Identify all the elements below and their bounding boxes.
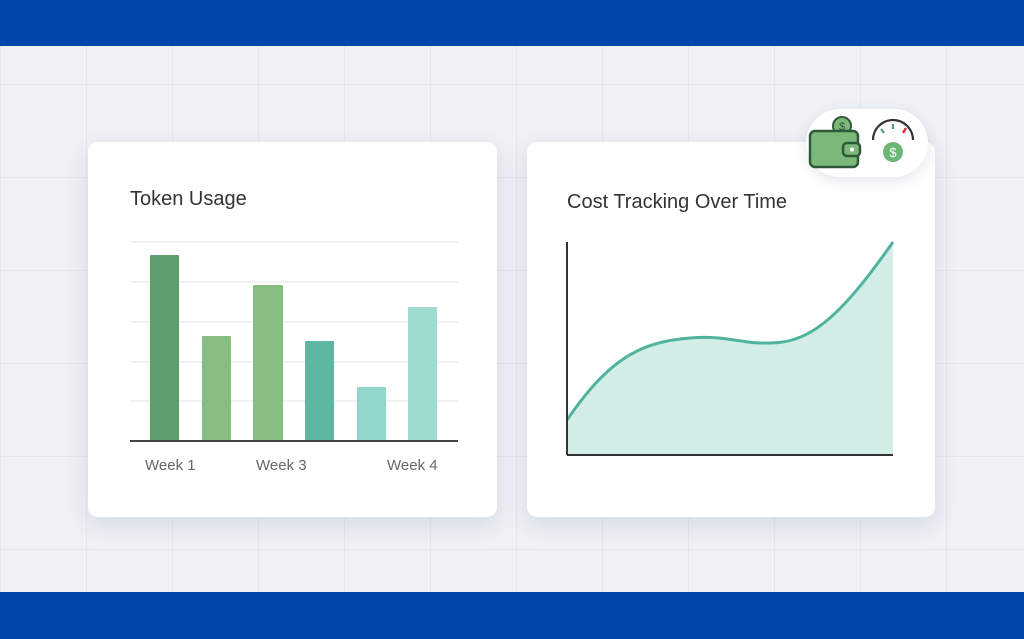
panel: cost tracking [527, 142, 935, 517]
icon: wallet: $ [839, 121, 845, 133]
heading: cost tracking: Cost Tracking Over Time [567, 191, 787, 213]
bottom banner [0, 592, 1024, 639]
bar chart: Week 3 [256, 457, 307, 474]
panel: token usage [88, 142, 497, 517]
area chart [566, 241, 894, 456]
heading: token usage: Token Usage [130, 188, 247, 210]
icon: gauge [873, 120, 913, 140]
bar chart: Week 1 [145, 457, 196, 474]
icon: wallet: $ [889, 145, 897, 160]
badge: wallet and gauge icons [806, 109, 928, 177]
icon: wallet [808, 116, 914, 168]
top banner [0, 0, 1024, 46]
bar chart [130, 241, 458, 474]
bar chart: Week 4 [387, 457, 438, 474]
